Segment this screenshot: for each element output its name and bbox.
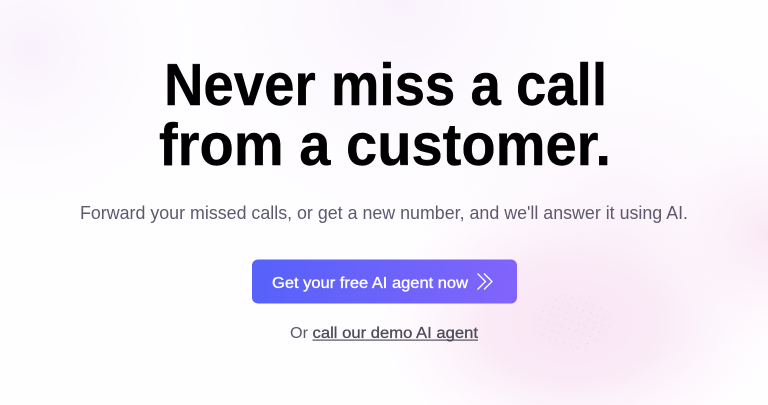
- subtitle: Forward your missed calls, or get a new number, and we'll answer it using AI.: [80, 203, 688, 223]
- icon: double chevron: [478, 274, 492, 290]
- title: Never miss a call: [164, 52, 607, 118]
- call to action button: Get your free AI agent now: [272, 275, 469, 292]
- call to action button: [252, 260, 517, 304]
- demo call link: Or: [290, 325, 308, 342]
- dot texture: [534, 294, 612, 353]
- demo call link: call our demo AI agent: [312, 325, 479, 342]
- title: from a customer.: [159, 112, 611, 178]
- title: [159, 52, 611, 178]
